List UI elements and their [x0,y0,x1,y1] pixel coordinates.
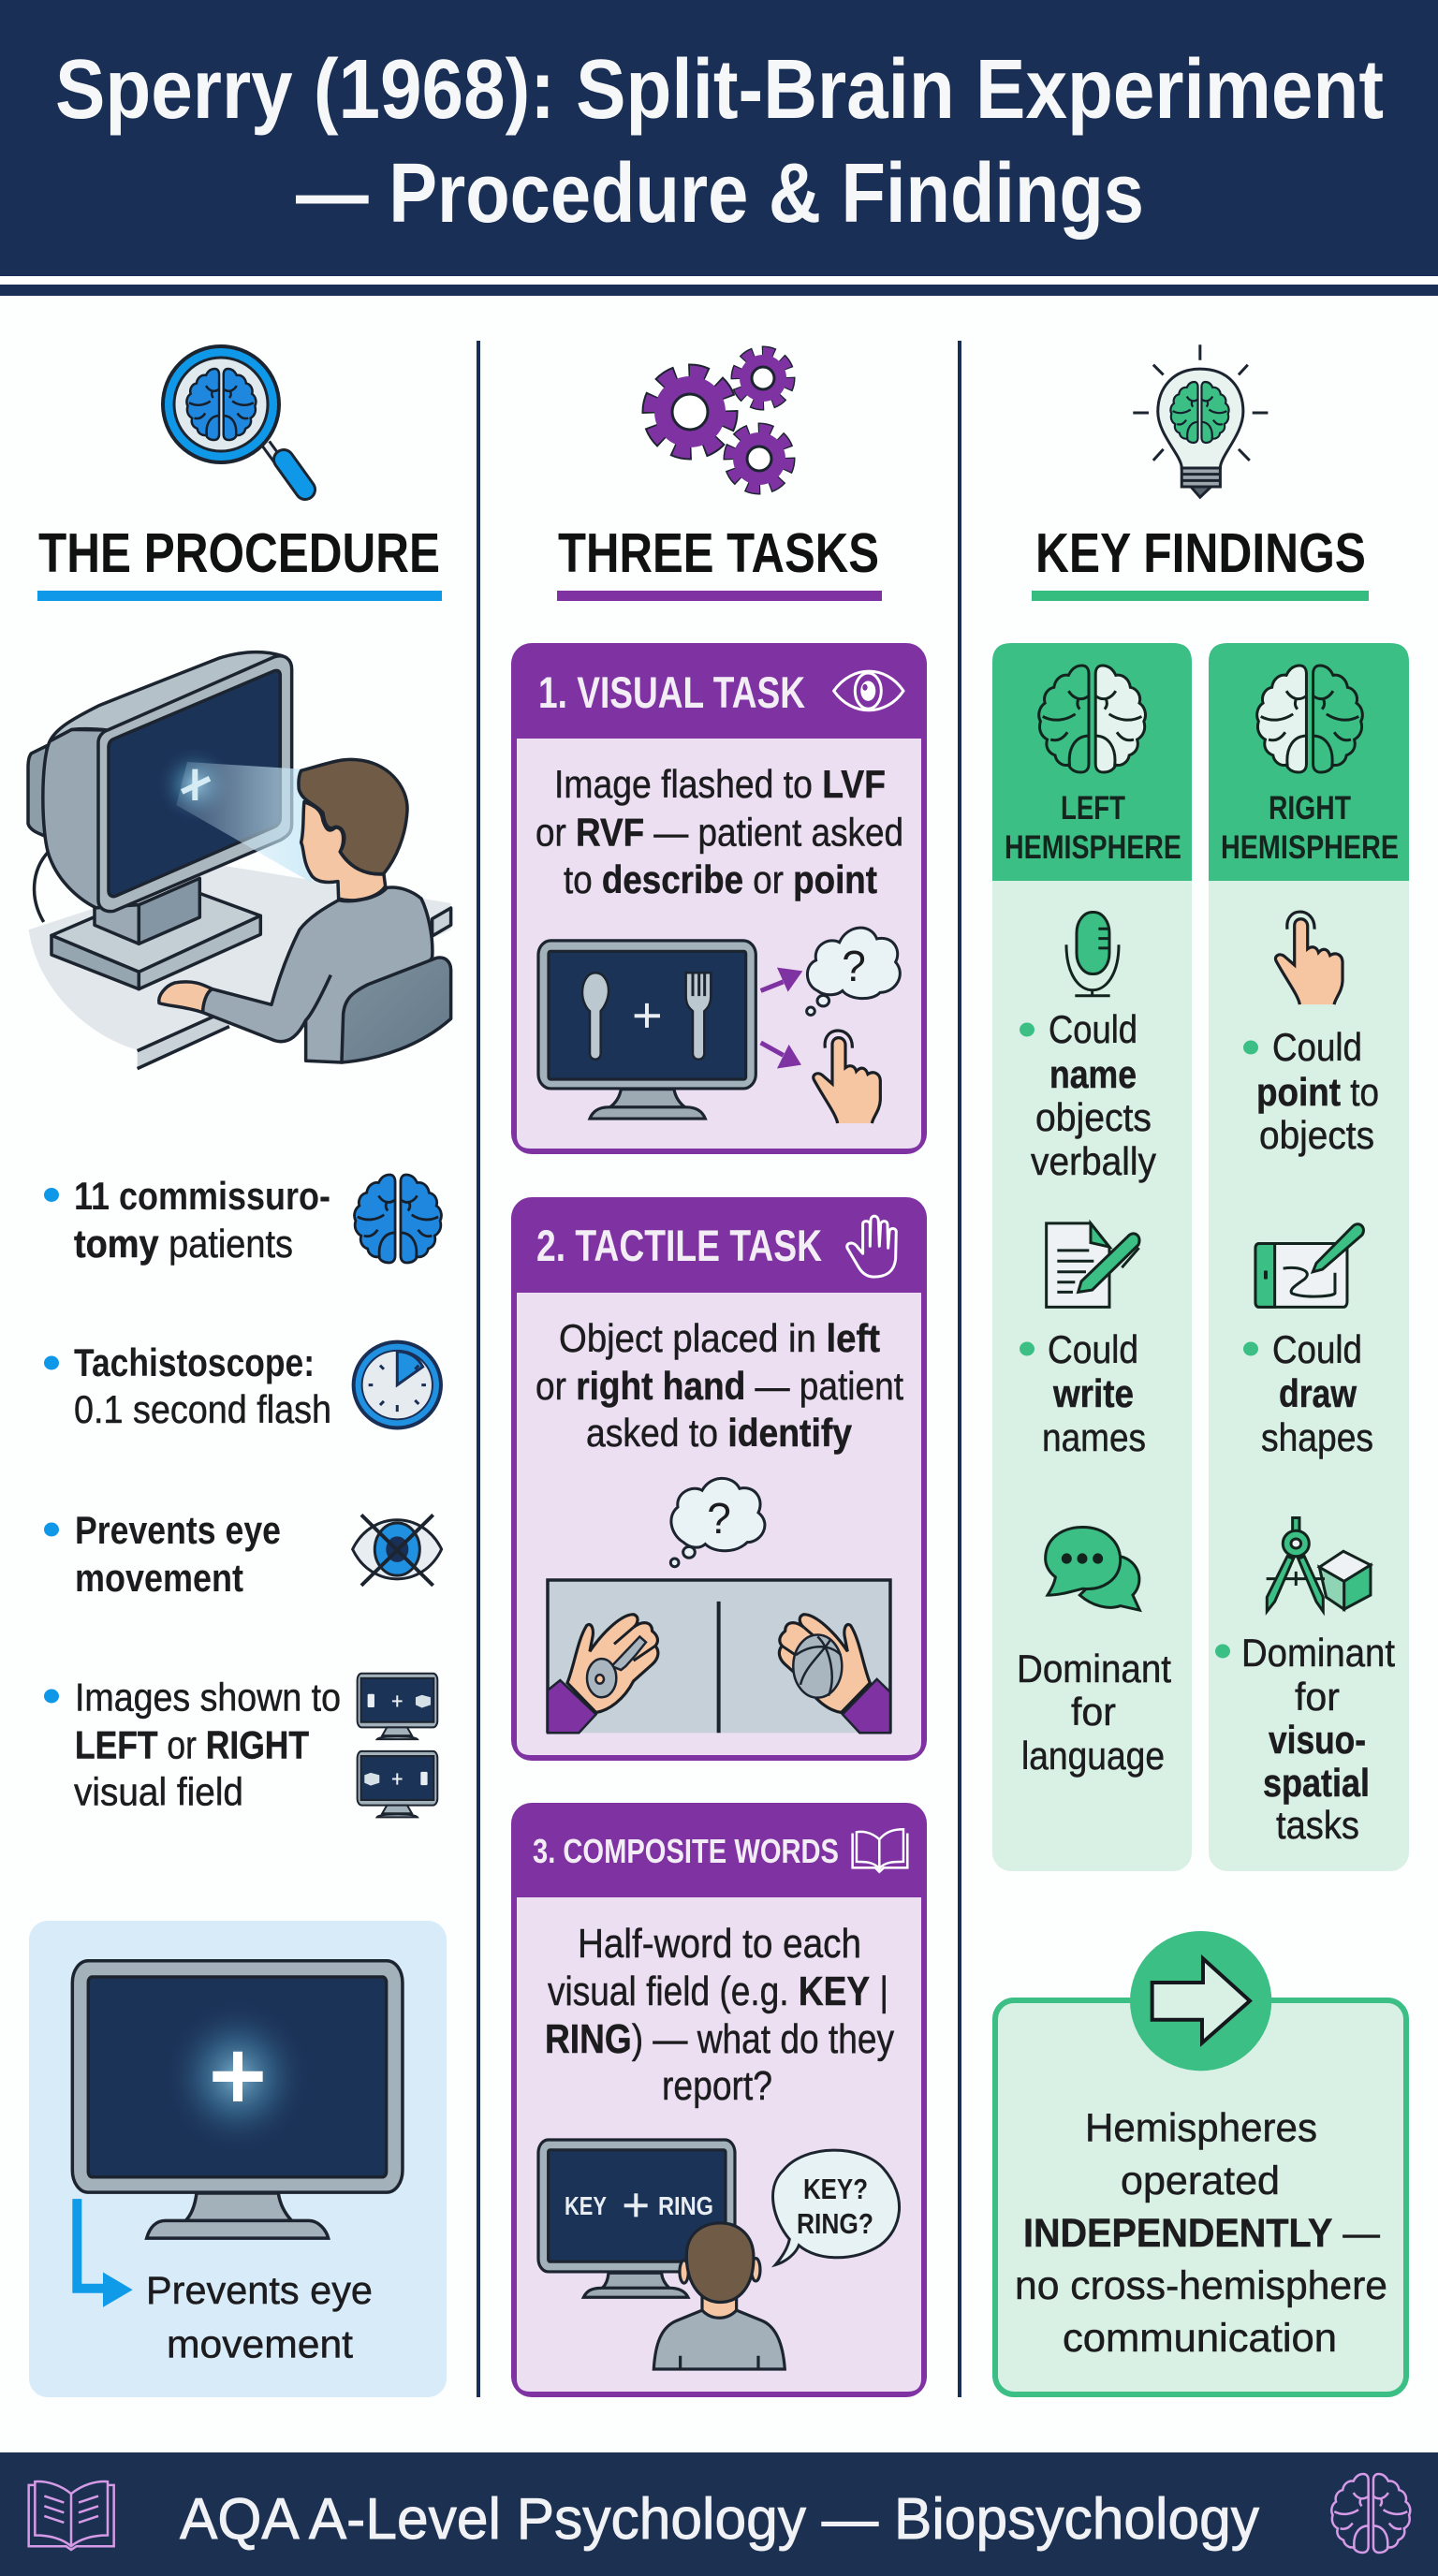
bullet: visual field: Images shown to [75,1676,341,1719]
illustration: patient seen from behind [653,2223,785,2369]
icon: open book [853,1829,907,1872]
card body text: Half-word to each [578,1921,861,1967]
bullet: tachistoscope [44,1340,331,1431]
callout text: movement [167,2321,353,2366]
panel: the procedure [28,346,451,2397]
panel: fixation cross monitor callout [29,1921,447,2397]
label: left hemisphere [1005,790,1181,866]
finding: could name objects verbally: Could [1049,1007,1137,1051]
finding: could point to objects: point to [1256,1070,1379,1114]
bullet: eye movement: movement [75,1556,243,1600]
bullet: tachistoscope: 0.1 second flash [74,1387,331,1431]
icon: thought bubble question [807,928,900,1015]
illustration: monitor with fixation cross [72,1961,403,2238]
panel: three tasks [511,352,927,2397]
icon: gears [650,352,790,489]
finding: dominant for language: language [1021,1734,1165,1778]
bullet: eye movement [44,1508,281,1600]
conclusion text: operated [1121,2159,1280,2203]
finding: could point to objects [1243,1025,1379,1157]
column: right hemisphere [1209,643,1409,1871]
conclusion text [1015,2106,1387,2361]
card body text: to describe or point [564,857,877,901]
finding: could point to objects: Could [1272,1025,1362,1069]
finding: dominant for language: for [1071,1690,1116,1734]
card body text: report? [662,2063,772,2109]
card: tactile task [511,1197,927,1761]
conclusion text: communication [1063,2316,1337,2361]
finding: dominant for visuo-spatial tasks: for [1295,1675,1340,1719]
illustration: monitor showing key + ring: RING [658,2191,713,2220]
icon: eye [834,671,903,710]
bullet: visual field: LEFT or RIGHT [75,1723,309,1767]
card body text: or RVF — patient asked [536,811,903,854]
card header text: 2. TACTILE TASK [536,1221,822,1270]
icon: thought bubble question: ? [707,1494,731,1543]
finding: could write names: write [1052,1371,1134,1415]
arrows to response icons [761,968,802,1068]
finding: dominant for language [1017,1647,1171,1778]
icon: crossed-out eye [353,1515,442,1586]
finding: dominant for visuo-spatial tasks: Dominant [1241,1631,1395,1675]
icon: document and pen [1047,1223,1139,1307]
panel: key findings [992,344,1409,2394]
card body text [536,1316,903,1455]
bullet: eye movement: Prevents eye [75,1508,281,1552]
card body text: or right hand — patient [536,1364,903,1408]
card header text: 3. COMPOSITE WORDS [533,1832,839,1870]
finding: could name objects verbally: verbally [1031,1139,1156,1183]
card body text: Object placed in left [559,1316,880,1360]
speech bubble: key? ring?: RING? [797,2207,873,2240]
icon: light bulb with brain [1133,344,1268,497]
icon: brain outline [1331,2474,1410,2553]
finding: dominant for visuo-spatial tasks: tasks [1276,1803,1359,1847]
finding: could name objects verbally: objects [1035,1095,1152,1139]
header banner [0,0,1438,296]
column dividers [477,341,961,2397]
finding: could point to objects: objects [1259,1113,1374,1157]
conclusion text: Hemispheres [1085,2106,1317,2151]
icon: microphone [1066,912,1119,996]
finding: could name objects verbally [1020,1007,1156,1183]
icon: clock [354,1342,441,1428]
bullet: patients: 11 commissuro- [74,1174,330,1218]
icon: magnifying glass with brain [163,346,305,490]
icon: arrow in circle [1130,1931,1271,2071]
card: composite words [511,1803,927,2397]
icon: speech bubbles [1046,1528,1139,1610]
heading: the procedure [37,522,442,601]
card body text: Image flashed to LVF [554,762,886,806]
finding: could draw shapes [1243,1327,1373,1459]
icon: compass and cube [1267,1517,1371,1612]
icon: pointing hand [814,1031,880,1123]
heading: the procedure: THE PROCEDURE [38,522,440,584]
bullet: tachistoscope: Tachistoscope: [74,1340,315,1384]
heading: key findings [1032,522,1369,601]
card body text [545,1921,894,2109]
icon: open book [29,2481,114,2550]
column: left hemisphere [992,643,1192,1871]
card body text [536,762,903,901]
finding: could draw shapes: Could [1272,1327,1362,1371]
finding: dominant for visuo-spatial tasks [1215,1631,1395,1847]
footer text: AQA A-Level Psychology — Biopsychology [180,2487,1259,2552]
finding: could draw shapes: draw [1279,1371,1357,1415]
label: right hemisphere: HEMISPHERE [1221,829,1399,866]
illustration: person viewing tachistoscope monitor [28,652,451,1069]
illustration: monitor showing key + ring: KEY [565,2191,607,2220]
card header text: 1. VISUAL TASK [538,667,805,717]
speech bubble: key? ring?: KEY? [803,2173,868,2205]
icon: thought bubble question [670,1478,765,1567]
card body text: RING) — what do they [545,2016,894,2062]
icon: open hand [847,1216,896,1277]
finding: dominant for visuo-spatial tasks: visuo- [1269,1718,1366,1762]
finding: could write names [1020,1327,1146,1459]
callout: conclusion [995,1931,1406,2394]
card: visual task [511,643,927,1154]
card body text: asked to identify [586,1411,853,1455]
label: left hemisphere: LEFT [1061,790,1125,827]
icon: left brain [1039,666,1145,772]
illustration: monitor showing key + ring [538,2140,735,2297]
finding: could write names: names [1042,1415,1146,1459]
illustration: screen with hands holding key and ball [548,1580,890,1733]
heading: key findings: KEY FINDINGS [1035,522,1366,584]
finding: could name objects verbally: name [1049,1052,1137,1096]
label: left hemisphere: HEMISPHERE [1005,829,1181,866]
bullet: patients: tomy patients [74,1222,293,1266]
icon: two small monitors [358,1674,437,1817]
arrow: to prevents eye movement [77,2199,133,2307]
label: right hemisphere [1221,790,1399,866]
icon: brain in bulb [1170,382,1229,443]
finding: dominant for visuo-spatial tasks: spatial [1263,1761,1370,1805]
icon: thought bubble question: ? [842,942,866,990]
title: — Procedure & Findings [296,147,1144,241]
conclusion text: no cross-hemisphere [1015,2263,1387,2308]
speech bubble: key? ring? [773,2150,900,2265]
label: right hemisphere: RIGHT [1269,790,1351,827]
illustration: monitor with spoon and fork [538,941,756,1119]
bullet: visual field [44,1676,341,1814]
icon: brain [355,1175,441,1263]
finding: could write names: Could [1048,1327,1138,1371]
finding: dominant for language: Dominant [1017,1647,1171,1690]
footer banner [0,2452,1438,2576]
bullet: patients [44,1174,330,1266]
icon: tablet and pen [1255,1224,1363,1307]
heading: three tasks: THREE TASKS [558,522,879,584]
bullet: visual field: visual field [74,1770,243,1814]
card body text: visual field (e.g. KEY | [548,1969,888,2014]
icon: pointing hand [1275,912,1343,1004]
heading: three tasks [557,522,882,601]
callout text [146,2268,373,2366]
callout text: Prevents eye [146,2268,373,2312]
title [55,43,1384,241]
finding: could draw shapes: shapes [1261,1415,1373,1459]
icon: right brain [1257,666,1362,772]
conclusion text: INDEPENDENTLY — [1023,2211,1380,2256]
